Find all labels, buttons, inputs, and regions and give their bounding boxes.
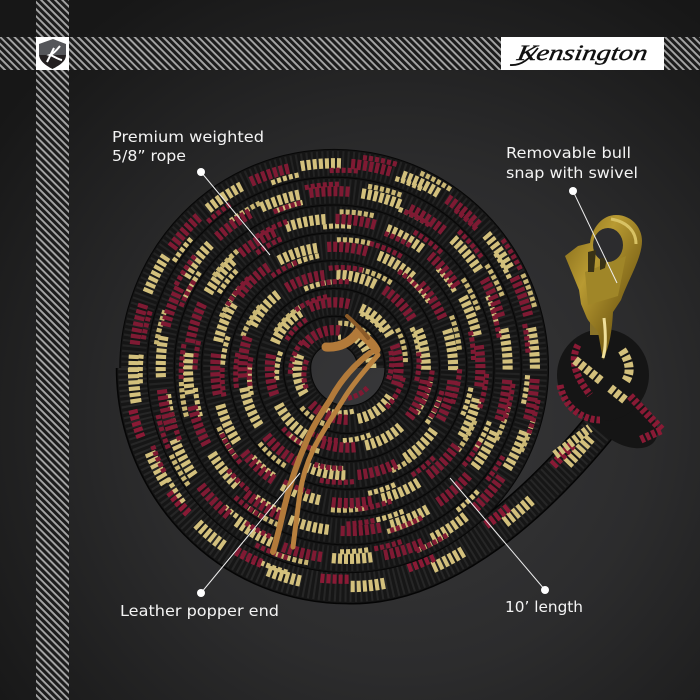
vertical hatched band: [36, 0, 69, 700]
rope spiral body: [133, 163, 535, 559]
brand logo: Kensington: [501, 37, 664, 70]
callout: leather popper end: Leather popper end: [120, 602, 279, 620]
callout: premium weighted rope: [112, 128, 270, 255]
callout: premium weighted rope: Premium weighted: [112, 128, 264, 146]
red strand segments: [133, 156, 542, 580]
callout: 10 foot length: [450, 478, 583, 616]
brand logo: Kensington: Kensington: [514, 40, 650, 65]
callout: 10 foot length: 10’ length: [505, 598, 583, 616]
rope knot: [555, 329, 669, 461]
horizontal hatched band: [0, 37, 700, 70]
rope tail: [127, 361, 606, 586]
callout: removable bull snap: snap with swivel: [506, 164, 638, 182]
coiled rope: [127, 156, 606, 586]
callout: premium weighted rope: 5/8” rope: [112, 147, 186, 165]
icon: shield logo: [36, 37, 69, 70]
callout: removable bull snap: [506, 144, 638, 283]
bull snap with swivel: [565, 215, 642, 360]
callout: leather popper end: [120, 473, 300, 620]
callout: removable bull snap: Removable bull: [506, 144, 631, 162]
leather popper end: [273, 316, 378, 552]
gold strand segments: [133, 156, 542, 580]
